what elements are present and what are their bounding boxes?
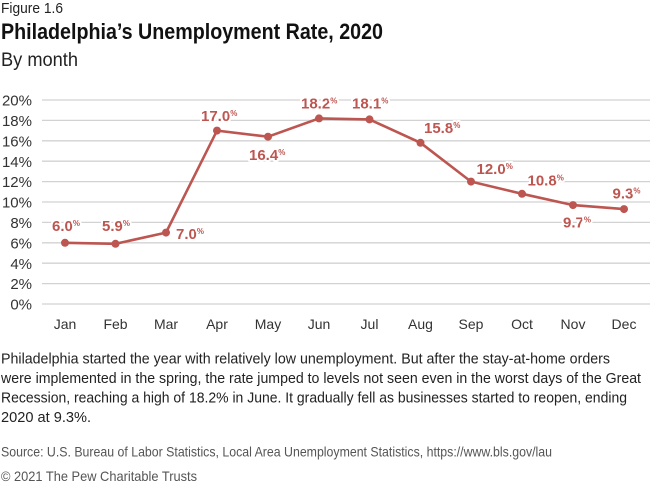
- body paragraph: 2020 at 9.3%.: [1, 409, 91, 426]
- x axis labels: Nov: [561, 316, 585, 332]
- source note: Source: U.S. Bureau of Labor Statistics, Local Area Unemployment Statistics, https://www.bls.gov/lau: [1, 444, 552, 460]
- x axis labels: Sep: [459, 316, 484, 332]
- y axis labels: 2%: [10, 276, 32, 293]
- subtitle: By month: [1, 50, 78, 71]
- body paragraph: Philadelphia started the year with relatively low unemployment. But after the stay-at-home orders: [1, 350, 610, 368]
- y axis labels: 6%: [10, 236, 32, 252]
- x axis labels: Jun: [308, 316, 330, 332]
- data labels: %: [557, 174, 564, 182]
- data labels: %: [123, 219, 130, 228]
- y axis labels: 10%: [2, 194, 32, 212]
- data labels: %: [330, 96, 337, 106]
- x axis labels: May: [255, 316, 281, 332]
- data labels: %: [584, 216, 591, 224]
- figure label: Figure 1.6: [1, 0, 63, 17]
- x axis labels: Apr: [206, 316, 228, 332]
- data labels: %: [506, 162, 513, 171]
- data labels: 18.1: [352, 96, 381, 112]
- data labels: 12.0: [476, 161, 506, 178]
- data labels: 17.0: [201, 108, 230, 125]
- data labels: 9.3: [612, 186, 633, 202]
- data labels: %: [197, 227, 204, 236]
- y axis labels: 0%: [10, 296, 32, 314]
- y axis labels: 12%: [2, 174, 32, 191]
- data labels: 7.0: [176, 226, 197, 243]
- data labels: %: [230, 109, 237, 118]
- data labels: %: [633, 186, 640, 196]
- data labels: %: [278, 148, 285, 157]
- body paragraph: [0, 350, 642, 426]
- x axis labels: Mar: [154, 316, 178, 332]
- x axis labels: [54, 316, 636, 332]
- data labels: %: [453, 121, 460, 130]
- x axis labels: Aug: [408, 316, 433, 332]
- y axis labels: [2, 92, 32, 314]
- x axis labels: Jan: [54, 316, 76, 332]
- x axis labels: Oct: [511, 316, 533, 332]
- y axis labels: 14%: [2, 154, 32, 171]
- y axis labels: 4%: [10, 256, 32, 273]
- data labels: 16.4: [249, 147, 278, 164]
- y axis labels: 8%: [10, 215, 32, 232]
- data labels: 10.8: [528, 172, 557, 190]
- y axis labels: 20%: [2, 92, 32, 110]
- data labels: %: [381, 96, 388, 106]
- data labels: 5.9: [102, 218, 123, 235]
- title: Philadelphia’s Unemployment Rate, 2020: [1, 19, 383, 44]
- data labels: 9.7: [563, 214, 584, 232]
- data labels: %: [73, 219, 80, 228]
- y axis labels: 18%: [2, 113, 32, 130]
- data labels: 15.8: [424, 120, 453, 137]
- x axis labels: Feb: [103, 316, 128, 332]
- x axis labels: Dec: [612, 316, 636, 332]
- line series: [61, 114, 628, 248]
- data labels: [52, 96, 640, 243]
- data labels: 18.2: [301, 96, 330, 112]
- data labels: 6.0: [52, 218, 73, 235]
- y axis labels: 16%: [2, 134, 32, 150]
- x axis labels: Jul: [361, 316, 378, 332]
